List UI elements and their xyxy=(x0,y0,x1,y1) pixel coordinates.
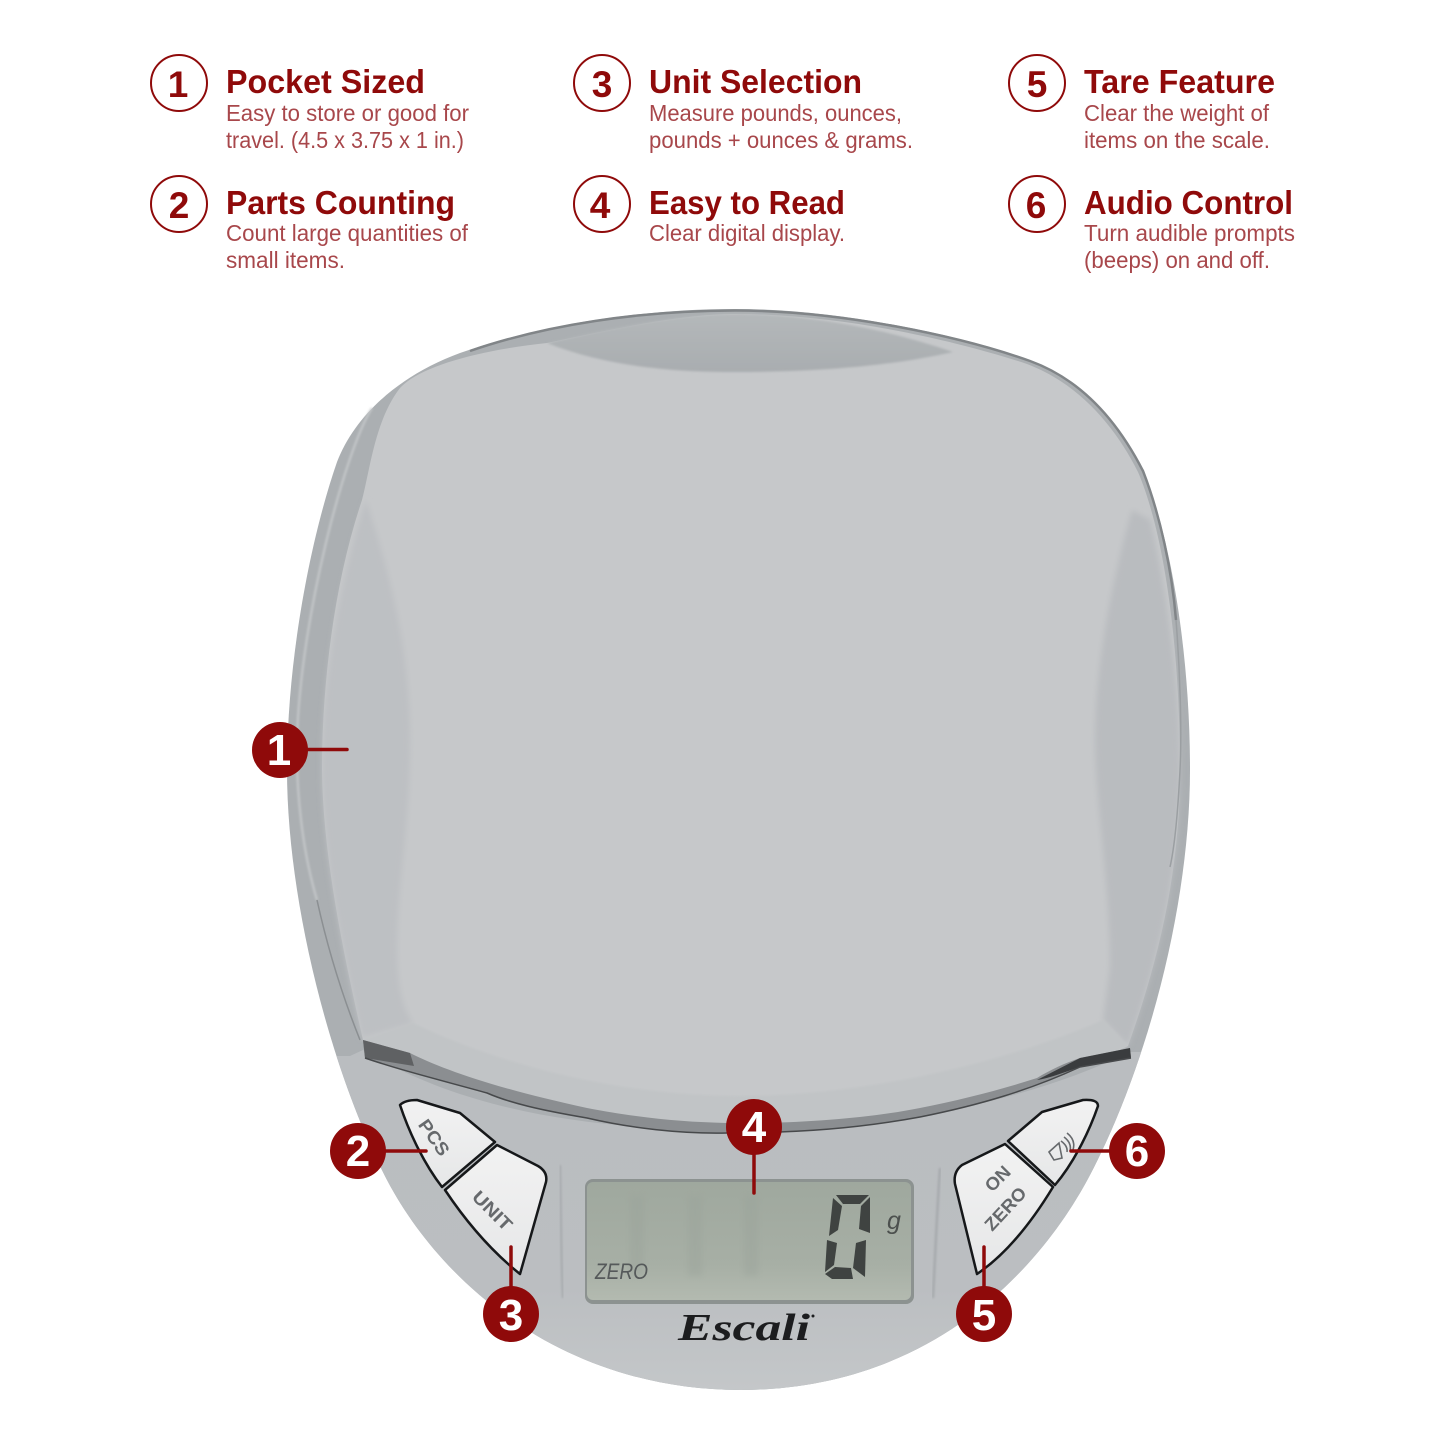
callout 3 xyxy=(483,1247,539,1342)
left shaded side xyxy=(322,500,413,1038)
platform surface xyxy=(322,314,1180,1125)
feature list xyxy=(151,55,1295,273)
feature 1: pocket sized: travel. (4.5 x 3.75 x 1 in.) xyxy=(226,127,464,153)
feature 3: unit selection: Unit Selection xyxy=(649,63,862,100)
button: ON ZERO xyxy=(955,1144,1053,1274)
feature 6: audio control: (beeps) on and off. xyxy=(1084,247,1270,273)
button: audio xyxy=(1008,1100,1098,1185)
icon: speaker xyxy=(1049,1133,1074,1160)
button: UNIT: UNIT xyxy=(468,1187,516,1235)
feature 1: pocket sized: Easy to store or good for xyxy=(226,100,469,126)
left highlight ridge xyxy=(297,408,372,900)
feature 2: parts counting: 2 xyxy=(169,185,189,226)
right shaded side xyxy=(1095,510,1180,1046)
callout 4: 4 xyxy=(742,1103,767,1152)
scale illustration xyxy=(280,309,1200,1400)
callout 1: 1 xyxy=(267,726,291,775)
feature 5: tare feature: 5 xyxy=(1027,64,1047,105)
feature 2: parts counting: Parts Counting xyxy=(226,184,455,221)
callout 2 xyxy=(330,1123,426,1179)
feature 1: pocket sized: 1 xyxy=(168,64,188,105)
feature 4: easy to read xyxy=(574,176,845,246)
button: ON ZERO: ZERO xyxy=(981,1183,1031,1235)
LCD zero label: ZERO xyxy=(594,1259,648,1284)
callout 5 xyxy=(956,1247,1012,1342)
feature 5: tare feature: Clear the weight of xyxy=(1084,100,1270,126)
feature 1: pocket sized xyxy=(151,55,469,153)
button: PCS: PCS xyxy=(414,1115,454,1160)
callout 1 xyxy=(252,722,347,778)
feature 2: parts counting: small items. xyxy=(226,247,345,273)
button: ON ZERO: ON xyxy=(981,1162,1015,1196)
panel dividers xyxy=(560,1165,940,1298)
feature 4: easy to read: Easy to Read xyxy=(649,184,845,221)
LCD zero digit xyxy=(825,1195,870,1279)
feature 5: tare feature xyxy=(1009,55,1275,153)
feature 6: audio control: 6 xyxy=(1026,185,1046,226)
feature 3: unit selection: 3 xyxy=(592,64,612,105)
platform right edge line xyxy=(1170,620,1181,867)
callout 6: 6 xyxy=(1125,1127,1149,1176)
feature 5: tare feature: Tare Feature xyxy=(1084,63,1275,100)
feature 3: unit selection: pounds + ounces & grams. xyxy=(649,127,913,153)
slot between platform and panel xyxy=(363,1040,1131,1133)
feature 4: easy to read: 4 xyxy=(590,185,611,226)
lower control panel xyxy=(336,1050,1142,1390)
button: UNIT xyxy=(445,1145,546,1274)
feature 4: easy to read: Clear digital display. xyxy=(649,220,845,246)
callout 4 xyxy=(726,1099,782,1193)
feature 6: audio control xyxy=(1009,176,1295,273)
LCD unit: g xyxy=(887,1207,901,1235)
platform top edge line xyxy=(470,310,1176,620)
platform lower strip xyxy=(362,1020,1128,1125)
feature 2: parts counting xyxy=(151,176,469,273)
button: PCS xyxy=(400,1100,495,1187)
ghost segments xyxy=(630,1196,758,1276)
feature 1: pocket sized: Pocket Sized xyxy=(226,63,425,100)
callout 6 xyxy=(1071,1123,1165,1179)
callout 3: 3 xyxy=(499,1291,523,1340)
feature 6: audio control: Audio Control xyxy=(1084,184,1293,221)
callout 2: 2 xyxy=(346,1127,370,1176)
feature 3: unit selection xyxy=(574,55,913,153)
platform top shaded arc xyxy=(547,314,953,372)
feature 6: audio control: Turn audible prompts xyxy=(1084,220,1295,246)
Escali logo: Escali xyxy=(677,1307,811,1349)
LCD display xyxy=(585,1179,914,1304)
feature 3: unit selection: Measure pounds, ounces, xyxy=(649,100,902,126)
feature 5: tare feature: items on the scale. xyxy=(1084,127,1270,153)
feature 2: parts counting: Count large quantities of xyxy=(226,220,469,246)
scale body outline xyxy=(287,309,1190,1390)
left lower rim line xyxy=(317,900,360,1040)
callout 5: 5 xyxy=(972,1291,996,1340)
